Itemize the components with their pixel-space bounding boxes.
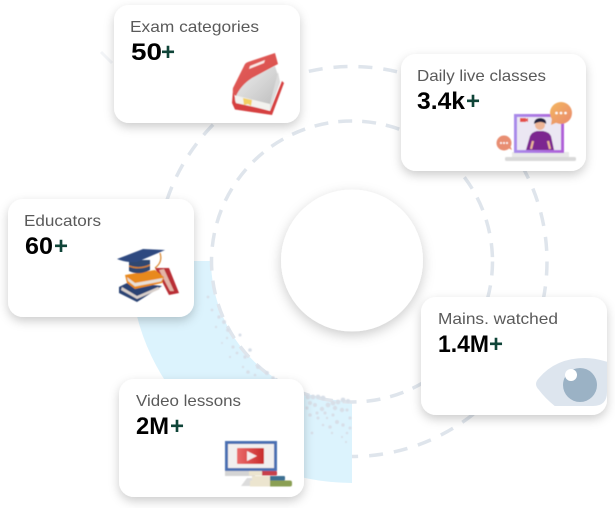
inner dashed ring <box>212 121 492 402</box>
stat: 60+: 60 <box>25 233 53 260</box>
stat: 2M+: 2M <box>136 413 169 440</box>
center white circle <box>281 190 423 332</box>
light blue quarter-ring sector <box>130 261 352 483</box>
card: video lessons <box>119 379 304 497</box>
icon: laptop with presenter <box>496 102 576 161</box>
scattered dots on sector <box>207 296 352 443</box>
stat: 2M+ <box>136 413 184 440</box>
stat: 50+: + <box>161 39 175 66</box>
icon: red book <box>232 53 284 115</box>
label: video lessons: Video lessons <box>136 393 241 410</box>
faint arc behind exam card <box>101 52 112 63</box>
card: educators <box>8 199 194 317</box>
stat: 3.4k+: + <box>466 88 480 115</box>
card: exam categories <box>114 5 300 123</box>
icon: eye <box>536 358 607 406</box>
label: exam categories: Exam categories <box>130 19 259 36</box>
card: daily live classes <box>401 54 586 171</box>
stat: 60+ <box>25 233 68 260</box>
stat: 1.4M+: 1.4M <box>438 331 489 358</box>
stat: 1.4M+: + <box>489 331 503 358</box>
stat: 60+: + <box>54 233 68 260</box>
icon: video monitor and books <box>225 441 292 486</box>
stat: 2M+: + <box>170 413 184 440</box>
stat: 50+ <box>131 39 175 66</box>
card: mains watched <box>421 297 615 420</box>
label: daily live classes: Daily live classes <box>417 68 546 85</box>
icon: graduation cap on books <box>117 249 179 302</box>
stat: 3.4k+: 3.4k <box>417 88 466 115</box>
label: educators: Educators <box>24 213 101 230</box>
stat: 50+: 50 <box>131 39 162 66</box>
outer dashed ring <box>157 66 547 456</box>
label: mains watched: Mains. watched <box>438 311 558 328</box>
